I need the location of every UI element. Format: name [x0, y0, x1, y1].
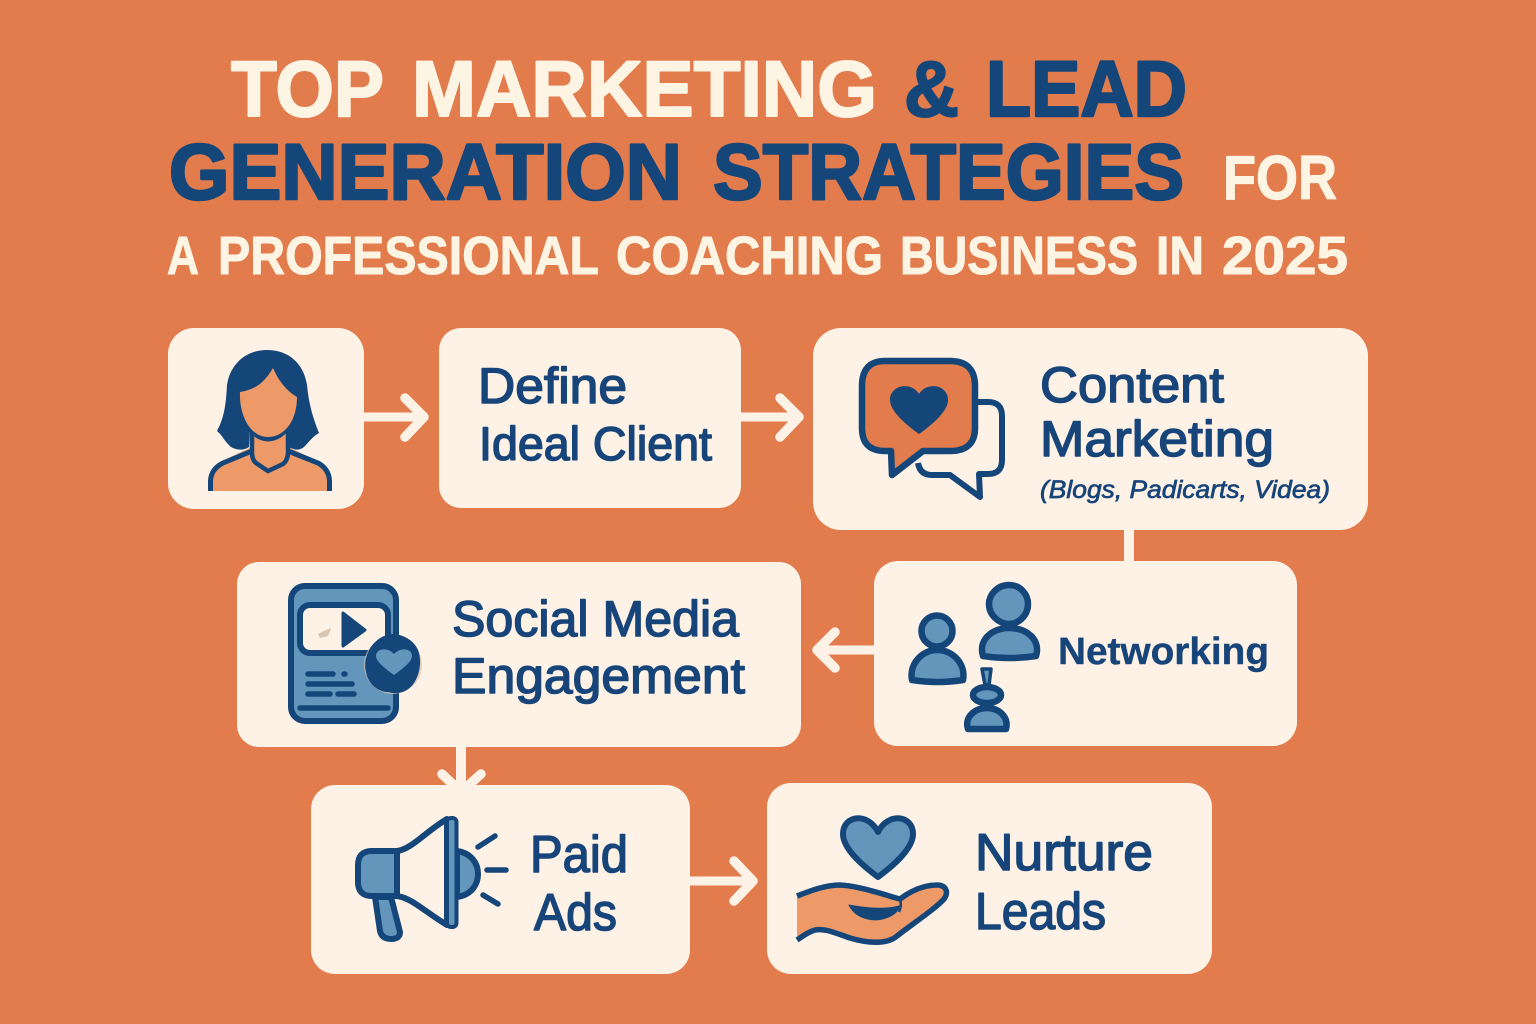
icon: chat bubbles with heart [862, 361, 1002, 497]
label: define ideal client [478, 358, 712, 470]
label: content marketing: Marketing [1040, 411, 1274, 467]
title: BUSINESS [900, 226, 1138, 286]
connector: content to networking [1124, 526, 1134, 564]
panel: paid ads [311, 785, 690, 974]
label: nurture leads: Nurture [975, 824, 1153, 882]
panel: nurture leads [767, 783, 1212, 974]
title: FOR [1223, 144, 1337, 213]
label: content marketing [1040, 357, 1330, 504]
title: MARKETING [412, 44, 877, 133]
arrow: social to paid ads [442, 743, 481, 792]
label: paid ads [530, 826, 628, 942]
panel: social media engagement [237, 562, 801, 747]
title: GENERATION [169, 127, 682, 216]
label: define ideal client: Define [478, 358, 627, 414]
label: content marketing: Content [1040, 357, 1224, 413]
label: social media engagement: Social Media [452, 591, 739, 647]
panel: define ideal client [439, 328, 741, 508]
panel: content marketing [813, 328, 1368, 530]
label: define ideal client: Ideal Client [479, 417, 712, 470]
arrow: networking to social [817, 632, 878, 668]
title: & [904, 44, 959, 133]
title [167, 44, 1348, 286]
label: social media engagement: Engagement [452, 648, 745, 704]
icon: people network [912, 585, 1037, 729]
arrow: define to content [738, 398, 799, 437]
arrow: paid ads to nurture [686, 861, 753, 901]
title: STRATEGIES [713, 127, 1184, 216]
label: content marketing: (Blogs, Padicarts, Videa) [1040, 476, 1330, 504]
title: A [167, 226, 199, 286]
label: nurture leads: Leads [975, 883, 1106, 941]
label: paid ads: Ads [534, 884, 617, 942]
label: paid ads: Paid [530, 826, 628, 884]
label: social media engagement [452, 591, 745, 704]
title: PROFESSIONAL [218, 226, 599, 286]
icon: woman portrait [208, 350, 332, 491]
title: 2025 [1222, 226, 1348, 286]
panel: ideal client portrait [168, 328, 364, 509]
label: nurture leads [975, 824, 1153, 941]
title: COACHING [616, 226, 883, 286]
panel: networking [874, 561, 1297, 746]
icon: video post with heart badge [291, 586, 422, 721]
arrow: client to define [360, 398, 424, 437]
title: IN [1156, 226, 1204, 286]
title: LEAD [986, 44, 1187, 133]
icon: hand holding heart [797, 818, 946, 942]
title: TOP [231, 44, 384, 133]
icon: megaphone [358, 818, 506, 939]
label: networking: Networking [1058, 631, 1269, 673]
